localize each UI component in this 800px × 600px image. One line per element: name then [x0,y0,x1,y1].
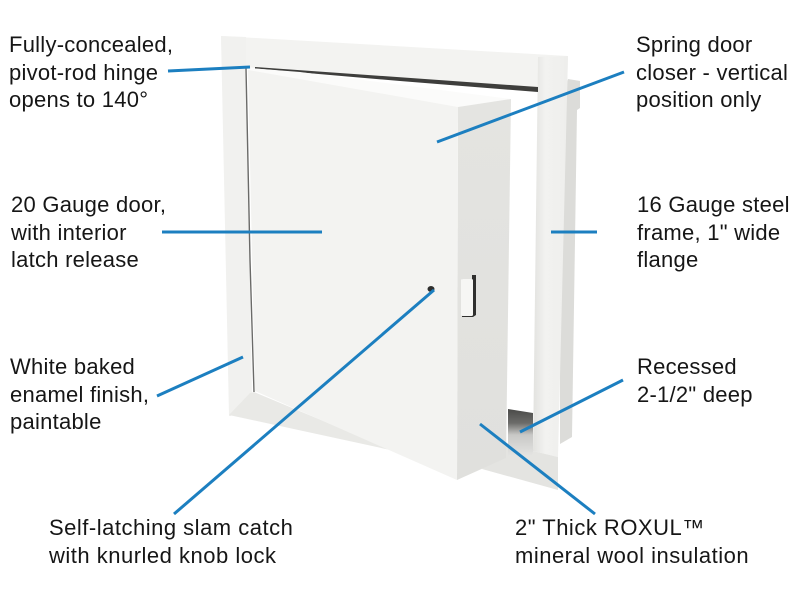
label: insulation [515,515,749,568]
label: spring closer: closer - vertical [636,60,788,84]
label: frame gauge: flange [637,247,698,272]
knurled knob [428,286,434,292]
line: spring closer [437,72,624,142]
frame back flange [560,79,580,444]
line: frame gauge [551,230,597,234]
label: recessed [637,354,753,406]
label: hinge: pivot-rod hinge [9,60,158,84]
frame left band [221,36,252,416]
label: frame gauge [637,192,790,272]
line: hinge [168,67,250,71]
label: enamel finish [10,354,149,434]
label: insulation: 2" Thick ROXUL™ [515,515,705,540]
label: spring closer [636,32,788,112]
label: enamel finish: enamel finish, [10,382,149,406]
label: recessed: Recessed [637,354,737,379]
label: slam catch: with knurled knob lock [49,542,276,568]
door frame [221,36,580,490]
top gap shadow [255,67,538,92]
label: door gauge [11,192,166,272]
line: insulation [480,424,595,514]
door front [248,70,458,480]
label: frame gauge: frame, 1" wide [637,220,780,244]
frame bottom flange [229,392,395,451]
label: door gauge: with interior [11,220,127,244]
recess opening [508,409,533,456]
hinge seam [246,68,254,392]
label: slam catch: Self-latching slam catch [49,515,293,540]
label: enamel finish: paintable [10,409,102,434]
label: hinge: Fully-concealed, [9,32,173,57]
label: enamel finish: White baked [10,354,135,379]
frame right band [533,56,568,457]
label: insulation: mineral wool insulation [515,542,749,568]
label: slam catch [49,515,293,568]
callout lines [157,67,624,514]
label: hinge [9,32,173,112]
frame top band [221,36,568,92]
door top edge [248,68,511,107]
label: hinge: opens to 140° [9,87,148,112]
label: door gauge: latch release [11,247,139,272]
label: frame gauge: 16 Gauge steel [637,192,790,217]
latch handle [461,275,476,317]
label: spring closer: Spring door [636,32,752,57]
line: enamel finish [157,357,243,396]
label: spring closer: position only [636,87,762,112]
label: recessed: 2-1/2" deep [637,382,753,406]
line: recessed [520,380,623,432]
line: door gauge [162,230,322,234]
door panel [248,68,511,480]
door side edge [457,99,511,480]
line: slam catch [174,290,434,514]
label: door gauge: 20 Gauge door, [11,192,166,217]
